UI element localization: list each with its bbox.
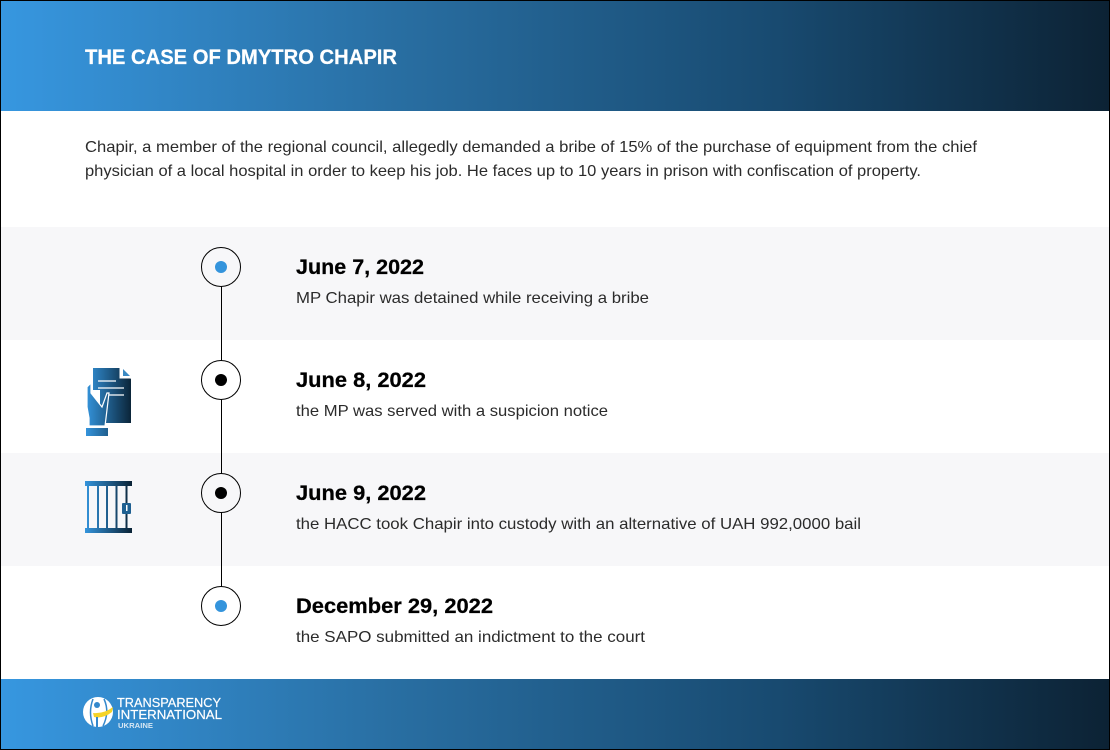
timeline line (221, 267, 222, 606)
logo: Transparency International Ukraine: UKRAINE (118, 723, 153, 730)
event: June 7 (296, 256, 649, 307)
event: June 9: June 9, 2022 (296, 482, 426, 505)
logo: Transparency International Ukraine (83, 695, 222, 730)
intro text: physician of a local hospital in order to keep his job. He faces up to 10 years in prison with confiscation of property. (85, 163, 921, 180)
timeline marker: December 29 (202, 586, 240, 626)
row background: June 9 (0, 453, 1110, 566)
event: December 29: December 29, 2022 (296, 595, 493, 618)
timeline marker: June 9 (202, 474, 240, 512)
icon: prison bars (85, 481, 132, 533)
intro text (85, 139, 978, 180)
intro text: Chapir, a member of the regional council, allegedly demanded a bribe of 15% of the purchase of equipment from the chief (85, 139, 978, 156)
timeline marker: June 7 (202, 248, 240, 286)
footer banner (0, 679, 1110, 750)
event: June 8: June 8, 2022 (296, 369, 426, 392)
logo: Transparency International Ukraine: INTERNATIONAL (117, 707, 222, 722)
title: THE CASE OF DMYTRO CHAPIR (85, 46, 397, 69)
event: June 8 (296, 369, 608, 420)
event: December 29 (296, 595, 646, 646)
event: December 29: the SAPO submitted an indictment to the court (296, 629, 646, 646)
timeline marker: June 8 (202, 360, 240, 400)
event: June 7: MP Chapir was detained while receiving a bribe (296, 290, 649, 307)
icon: hand holding document (86, 367, 132, 436)
event: June 9 (296, 482, 861, 533)
logo: Transparency International Ukraine: TRANSPARENCY (117, 695, 221, 710)
event: June 9: the HACC took Chapir into custody with an alternative of UAH 992,0000 bail (296, 516, 861, 533)
event: June 7: June 7, 2022 (296, 256, 424, 279)
event: June 8: the MP was served with a suspicion notice (296, 403, 608, 420)
row background: June 7 (0, 227, 1110, 340)
header banner (0, 0, 1110, 111)
